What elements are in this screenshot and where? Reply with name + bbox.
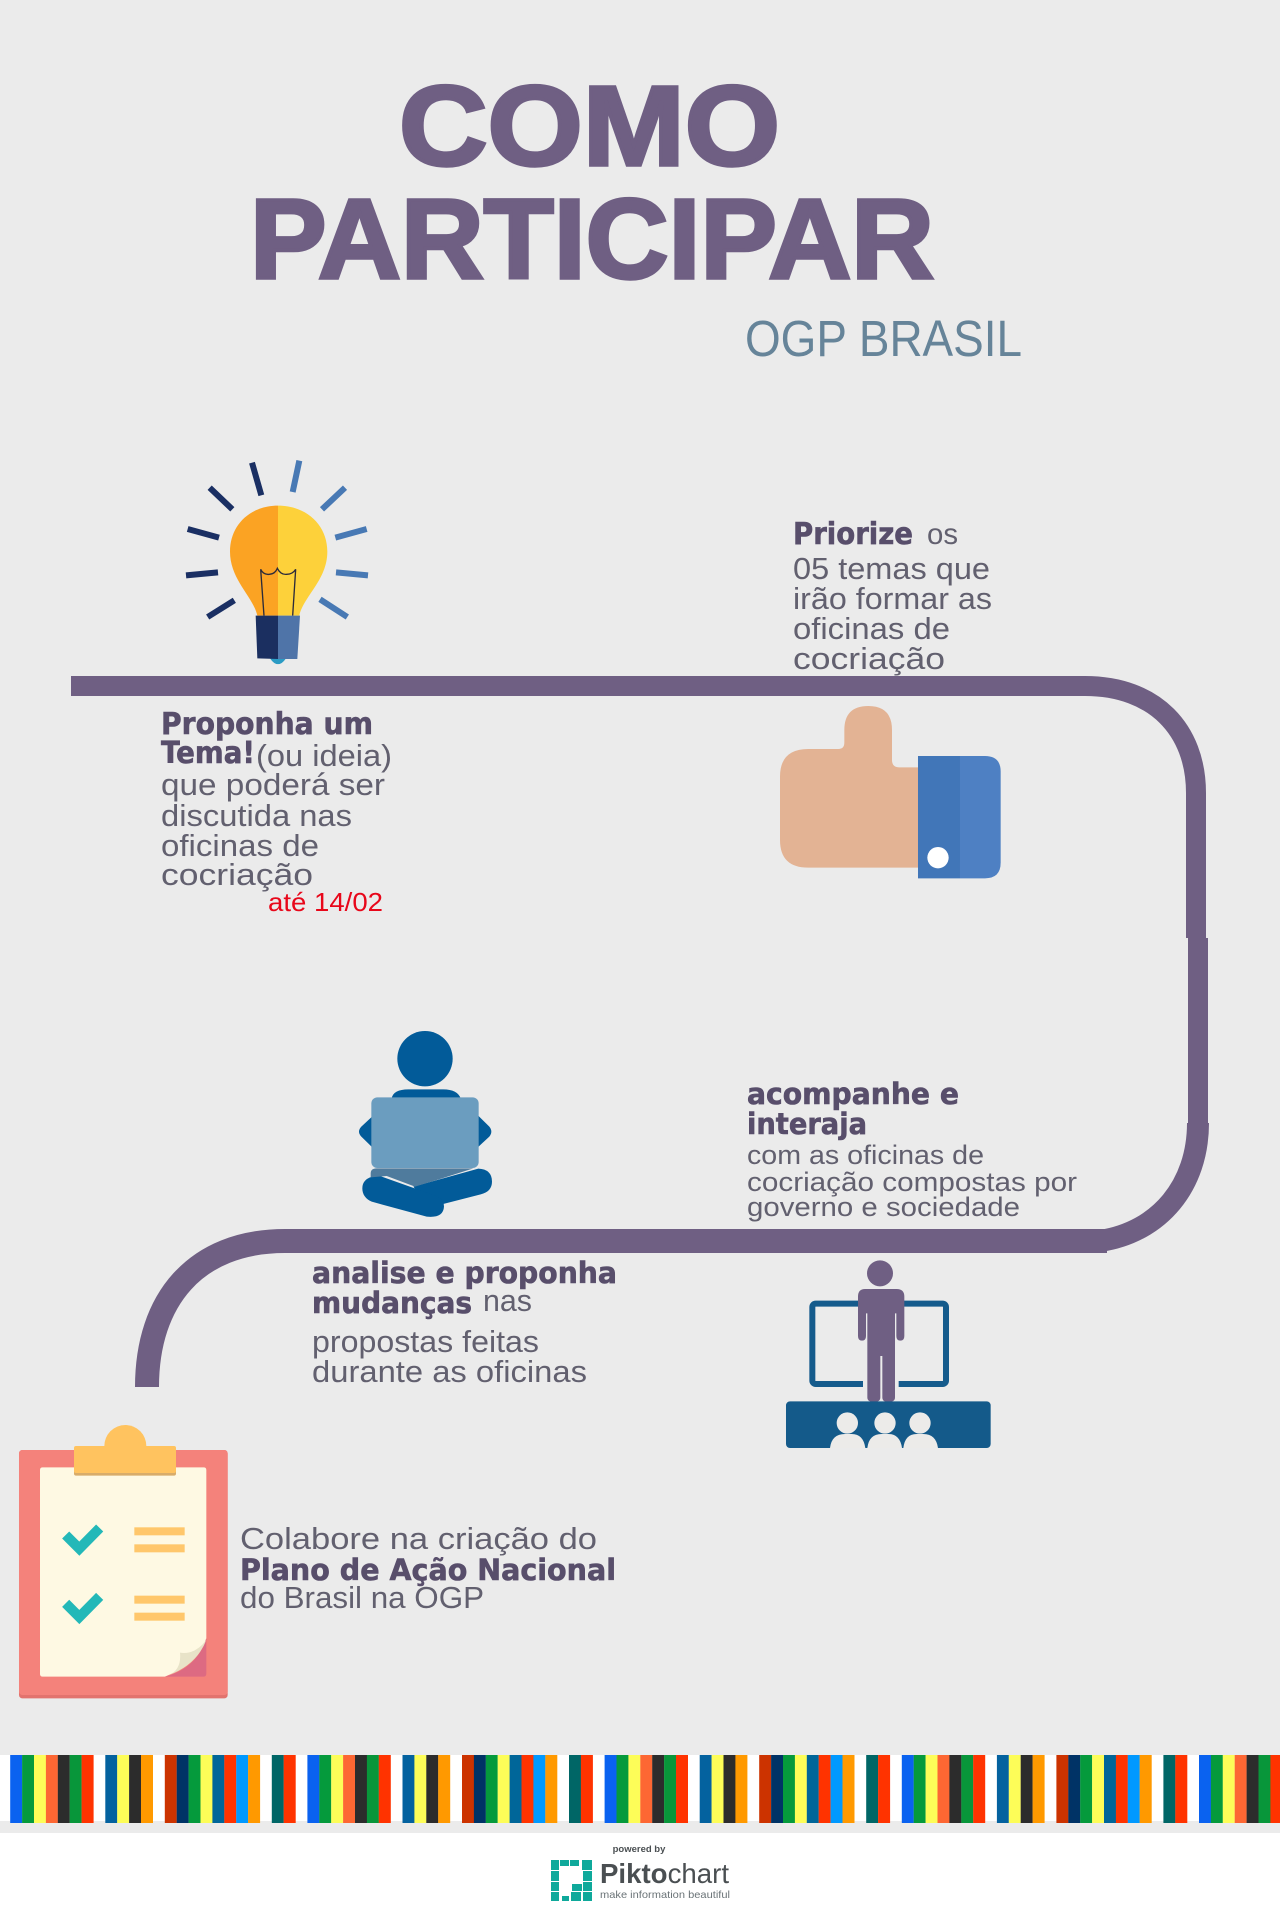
text block: propose a theme <box>161 707 392 892</box>
text block: prioritize: os <box>927 518 958 551</box>
text block: prioritize: irão formar as <box>793 581 992 616</box>
footer: powered by Piktochart: make information beautiful <box>600 1889 730 1901</box>
deadline note: até 14/02 <box>268 887 383 917</box>
icon: clipboard checklist <box>19 1425 228 1698</box>
colored stripe band <box>0 1755 1280 1823</box>
text block: prioritize <box>793 517 992 676</box>
text block: analyse and propose: propostas feitas <box>312 1324 539 1359</box>
text block: collaborate: do Brasil na OGP <box>240 1580 484 1615</box>
text block: propose a theme: discutida nas <box>161 798 352 833</box>
text block: follow and interact: acompanhe e <box>747 1077 959 1111</box>
text block: prioritize: 05 temas que <box>793 551 990 586</box>
text block: propose a theme: oficinas de <box>161 828 319 863</box>
icon: person with laptop <box>359 1031 492 1217</box>
text block: propose a theme: Proponha um <box>161 707 373 742</box>
title: PARTICIPAR <box>250 176 934 302</box>
text block: follow and interact: cocriação compostas por <box>747 1167 1077 1197</box>
text block: propose a theme: que poderá ser <box>161 767 385 802</box>
text block: follow and interact: com as oficinas de <box>747 1140 984 1170</box>
text block: propose a theme: cocriação <box>161 857 313 892</box>
text block: collaborate: Plano de Ação Nacional <box>240 1553 616 1587</box>
icon: light bulb <box>186 461 368 664</box>
icon: thumbs up <box>780 706 1001 878</box>
text block: prioritize: Priorize <box>793 517 913 552</box>
subtitle: OGP Brasil: OGP BRASIL <box>745 310 1022 367</box>
text block: collaborate: Colabore na criação do <box>240 1521 597 1556</box>
title: COMO <box>399 63 780 189</box>
text block: follow and interact: interaja <box>747 1107 867 1141</box>
footer: powered by Piktochart <box>0 1833 1280 1913</box>
text block: follow and interact <box>747 1077 1077 1222</box>
footer: powered by Piktochart: Piktochart <box>600 1858 729 1889</box>
footer: powered by Piktochart: powered by <box>613 1844 666 1855</box>
text block: analyse and propose: durante as oficinas <box>312 1354 587 1389</box>
text block: collaborate <box>240 1521 616 1615</box>
text block: prioritize: cocriação <box>793 641 945 676</box>
text block: propose a theme: Tema! <box>161 736 255 771</box>
text block: analyse and propose: analise e proponha <box>312 1256 617 1290</box>
text block: prioritize: oficinas de <box>793 611 950 646</box>
text block: propose a theme: (ou ideia) <box>256 738 392 773</box>
text block: follow and interact: governo e sociedade <box>747 1192 1020 1222</box>
text block: analyse and propose: nas <box>483 1283 532 1318</box>
timeline path <box>71 686 1198 1387</box>
title <box>250 63 934 302</box>
text block: analyse and propose: mudanças <box>312 1286 472 1320</box>
text block: analyse and propose <box>312 1256 617 1389</box>
icon: presenter with audience <box>786 1260 991 1448</box>
